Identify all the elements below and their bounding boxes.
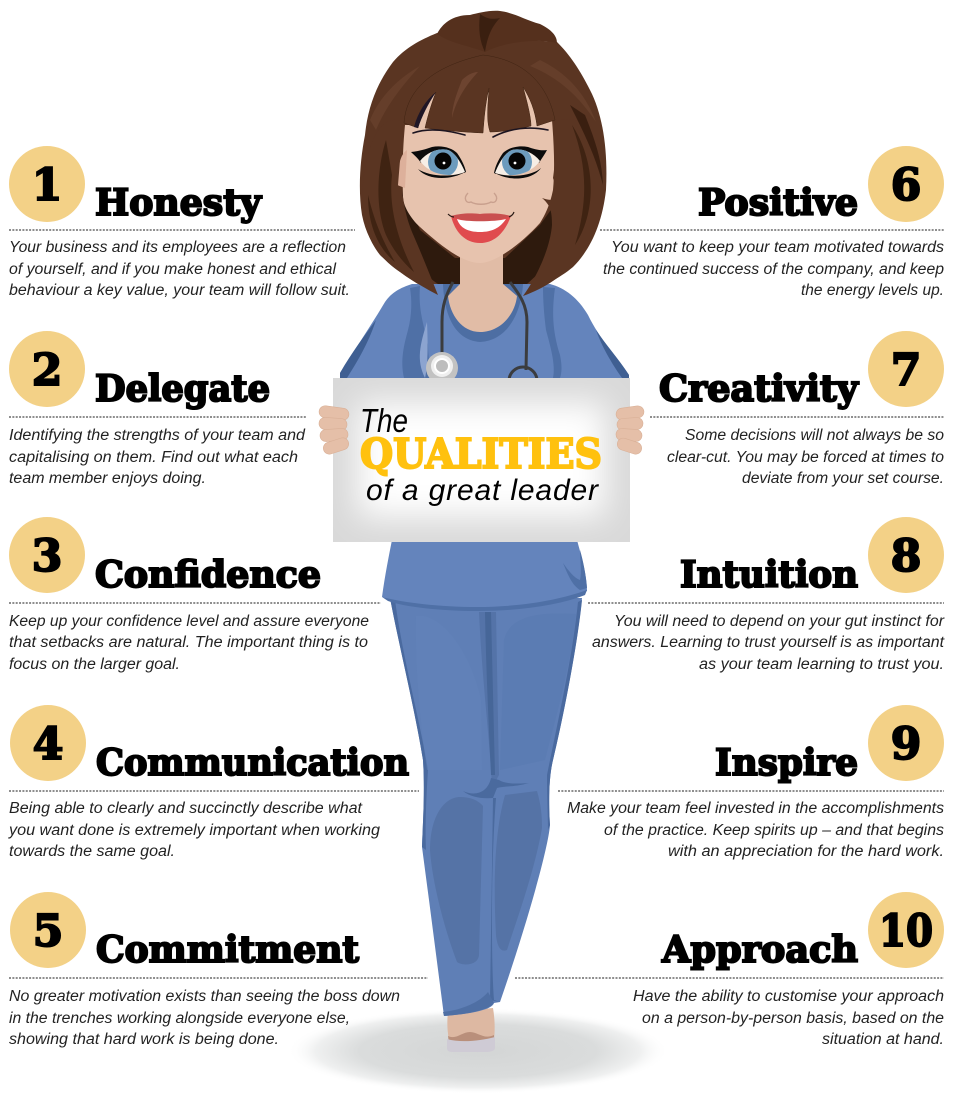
badge 1 xyxy=(9,146,85,222)
foot and shoe xyxy=(447,1008,495,1052)
description Positive xyxy=(603,239,944,299)
badge 3 xyxy=(9,517,85,593)
stethoscope xyxy=(426,281,538,378)
panel: Communication xyxy=(8,705,419,860)
side hair locks xyxy=(362,60,604,296)
badge 8: 8 xyxy=(891,531,921,582)
fringe highlight xyxy=(452,72,478,118)
description Positive: the energy levels up. xyxy=(801,282,944,299)
description Commitment: showing that hard work is being done. xyxy=(9,1031,279,1048)
description Inspire: Make your team feel invested in the accomplishments xyxy=(567,800,944,817)
description Confidence xyxy=(9,613,369,673)
heading Communication: Communication xyxy=(96,742,409,784)
badge 9: 9 xyxy=(891,719,921,770)
description Intuition: You will need to depend on your gut instinct for xyxy=(614,613,945,630)
description Approach xyxy=(633,988,944,1048)
eyebrows xyxy=(413,128,548,137)
badge 2 xyxy=(9,331,85,407)
panel: Approach xyxy=(515,892,944,1048)
description Honesty: behaviour a key value, your team will follow suit. xyxy=(9,282,350,299)
scrub trousers xyxy=(390,598,582,1016)
hair back silhouette xyxy=(360,33,606,296)
description Creativity: deviate from your set course. xyxy=(742,470,944,487)
description Inspire: with an appreciation for the hard work. xyxy=(668,843,944,860)
sign word: Qualities: QUALITIES xyxy=(360,430,602,478)
description Commitment xyxy=(9,988,400,1048)
heading Positive: Positive xyxy=(698,182,858,224)
nose xyxy=(465,193,497,204)
badge 3: 3 xyxy=(32,531,62,582)
description Approach: situation at hand. xyxy=(822,1031,944,1048)
description Confidence: focus on the larger goal. xyxy=(9,656,180,673)
panel: Inspire xyxy=(558,705,944,860)
fringe xyxy=(404,55,555,133)
badge 4: 4 xyxy=(33,719,63,770)
heading Creativity: Creativity xyxy=(659,368,859,410)
description Creativity xyxy=(667,427,944,487)
illustration: nurse leader figure xyxy=(308,10,648,1090)
floor shadow xyxy=(287,1008,669,1094)
description Approach: on a person-by-person basis, based on the xyxy=(642,1010,944,1027)
description Positive: You want to keep your team motivated towards xyxy=(611,239,944,256)
badge 4 xyxy=(10,705,86,781)
badge 5 xyxy=(10,892,86,968)
heading Honesty: Honesty xyxy=(95,182,262,224)
description Intuition: answers. Learning to trust yourself is as important xyxy=(592,634,945,651)
panel: Confidence xyxy=(9,517,381,673)
left hand xyxy=(318,405,350,456)
scrub top upper xyxy=(340,284,629,378)
panel: Positive xyxy=(600,146,944,299)
face xyxy=(403,85,554,263)
description Delegate: capitalising on them. Find out what each xyxy=(9,449,298,466)
badge 2: 2 xyxy=(32,345,62,396)
heading Confidence: Confidence xyxy=(95,554,321,596)
sign words: of a great leader: of a great leader xyxy=(366,474,599,507)
description Delegate: Identifying the strengths of your team and xyxy=(9,427,306,444)
description Communication xyxy=(8,800,380,860)
heading Intuition: Intuition xyxy=(680,554,858,596)
badge 1: 1 xyxy=(32,160,62,211)
badge 8 xyxy=(868,517,944,593)
left eye xyxy=(411,146,466,178)
sign word: The: The xyxy=(360,402,408,439)
description Honesty: of yourself, and if you make honest and ethical xyxy=(9,261,337,278)
heading Inspire: Inspire xyxy=(715,742,858,784)
heading Commitment: Commitment xyxy=(96,929,359,971)
badge 6 xyxy=(868,146,944,222)
description Intuition xyxy=(592,613,945,673)
panel: Creativity xyxy=(650,331,944,487)
description Confidence: Keep up your confidence level and assure everyone xyxy=(9,613,369,630)
description Honesty: Your business and its employees are a reflection xyxy=(9,239,346,256)
bun strands xyxy=(479,14,500,52)
description Creativity: Some decisions will not always be so xyxy=(685,427,944,444)
description Confidence: that setbacks are natural. The important thing is to xyxy=(9,634,368,651)
badge 5: 5 xyxy=(33,906,63,957)
panel: Honesty xyxy=(9,146,355,299)
right eye xyxy=(494,146,547,178)
description Intuition: as your team learning to trust you. xyxy=(699,656,944,673)
panel: Intuition xyxy=(588,517,945,673)
scrub top lower hem xyxy=(382,540,587,611)
smile xyxy=(448,212,514,243)
description Delegate xyxy=(9,427,306,487)
description Commitment: in the trenches working alongside everyone else, xyxy=(9,1010,350,1027)
sign xyxy=(333,378,630,542)
badge 7: 7 xyxy=(891,345,921,396)
description Positive: the continued success of the company, and keep xyxy=(603,261,944,278)
description Honesty xyxy=(9,239,350,299)
heading Delegate: Delegate xyxy=(95,368,270,410)
description Communication: you want done is extremely important when working xyxy=(8,822,380,839)
heading Approach: Approach xyxy=(661,929,858,971)
hair bun xyxy=(437,11,557,52)
badge 7 xyxy=(868,331,944,407)
description Communication: Being able to clearly and succinctly describe what xyxy=(9,800,363,817)
badge 10 xyxy=(868,892,944,968)
badge 6: 6 xyxy=(891,160,921,211)
description Communication: towards the same goal. xyxy=(9,843,175,860)
hair shadow behind neck xyxy=(400,190,558,284)
dark strand at fringe gap xyxy=(414,92,436,128)
description Inspire: of the practice. Keep spirits up – and that begins xyxy=(604,822,944,839)
description Approach: Have the ability to customise your approach xyxy=(633,988,944,1005)
badge 10: 10 xyxy=(879,906,933,957)
panel: Delegate xyxy=(9,331,307,487)
badge 9 xyxy=(868,705,944,781)
description Creativity: clear-cut. You may be forced at times to xyxy=(667,449,944,466)
ear xyxy=(397,150,407,188)
description Inspire xyxy=(567,800,944,860)
right hand xyxy=(615,405,645,456)
panel: Commitment xyxy=(9,892,428,1048)
description Delegate: team member enjoys doing. xyxy=(9,470,206,487)
neck xyxy=(448,250,517,332)
description Commitment: No greater motivation exists than seeing the boss down xyxy=(9,988,400,1005)
